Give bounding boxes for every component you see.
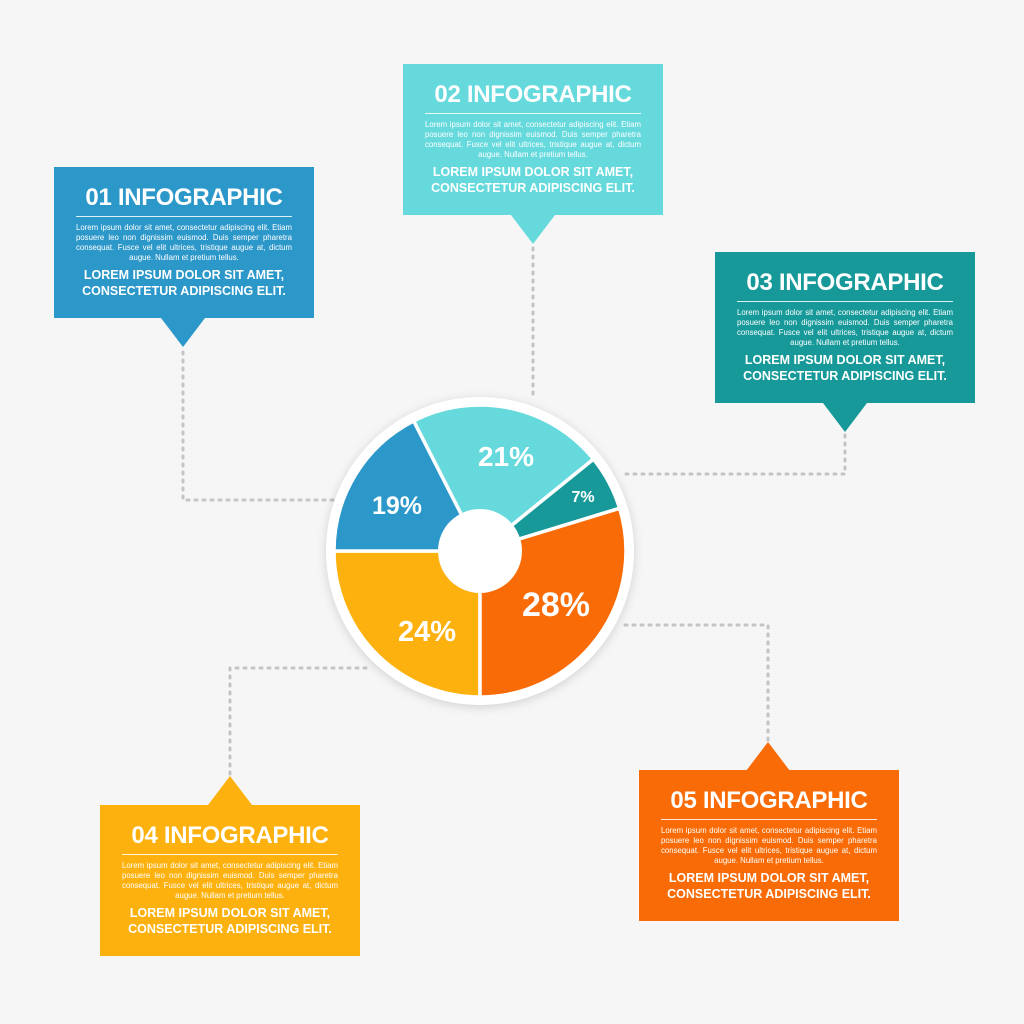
box 05: Lorem ipsum dolor sit amet, consectetur adipiscing elit. Etiam posuere leo non dignissim euismod. Duis semper pharetra consequat. Fusce vel elit ultrices, tristique augue at, dictum augue. Nullam et pretium tellus. — [661, 826, 877, 865]
box 03: LOREM IPSUM DOLOR SIT AMET, — [745, 353, 945, 367]
pie chart: 7% — [571, 489, 595, 506]
pie chart: 19% — [372, 492, 422, 520]
pointer 04 — [208, 776, 252, 805]
box 04: LOREM IPSUM DOLOR SIT AMET, — [130, 906, 330, 920]
slice 7% — [480, 459, 620, 551]
box 03: CONSECTETUR ADIPISCING ELIT. — [743, 369, 947, 383]
box 04: Lorem ipsum dolor sit amet, consectetur adipiscing elit. Etiam posuere leo non dignissim euismod. Duis semper pharetra consequat. Fusce vel elit ultrices, tristique augue at, dictum augue. Nullam et pretium tellus. — [122, 861, 338, 900]
box 02: Lorem ipsum dolor sit amet, consectetur adipiscing elit. Etiam posuere leo non dignissim euismod. Duis semper pharetra consequat. Fusce vel elit ultrices, tristique augue at, dictum augue. Nullam et pretium tellus. — [425, 120, 641, 159]
box 01: LOREM IPSUM DOLOR SIT AMET, — [84, 268, 284, 282]
box 01: CONSECTETUR ADIPISCING ELIT. — [82, 284, 286, 298]
box 05 — [639, 770, 899, 921]
box 04 — [100, 805, 360, 956]
pie chart: 24% — [398, 616, 456, 648]
box 05: LOREM IPSUM DOLOR SIT AMET, — [669, 871, 869, 885]
pointer 03 — [823, 403, 867, 432]
box 03: 03 INFOGRAPHIC — [746, 269, 944, 296]
box 02: CONSECTETUR ADIPISCING ELIT. — [431, 181, 635, 195]
box 05: CONSECTETUR ADIPISCING ELIT. — [667, 887, 871, 901]
pointer 05 — [746, 742, 790, 771]
box 03: Lorem ipsum dolor sit amet, consectetur adipiscing elit. Etiam posuere leo non dignissim euismod. Duis semper pharetra consequat. Fusce vel elit ultrices, tristique augue at, dictum augue. Nullam et pretium tellus. — [737, 308, 953, 347]
pie chart: 21% — [478, 441, 534, 472]
slice 19% — [334, 421, 480, 551]
box 01: Lorem ipsum dolor sit amet, consectetur adipiscing elit. Etiam posuere leo non dignissim euismod. Duis semper pharetra consequat. Fusce vel elit ultrices, tristique augue at, dictum augue. Nullam et pretium tellus. — [76, 223, 292, 262]
pointer 01 — [161, 318, 205, 347]
box 02: LOREM IPSUM DOLOR SIT AMET, — [433, 165, 633, 179]
slice 21% — [414, 405, 594, 551]
box 01 — [54, 167, 314, 318]
slice 28% — [480, 508, 626, 697]
box 02: 02 INFOGRAPHIC — [434, 81, 632, 108]
box 02 — [403, 64, 663, 215]
box 04: 04 INFOGRAPHIC — [131, 822, 329, 849]
pointer 02 — [511, 215, 555, 244]
box 05: 05 INFOGRAPHIC — [670, 787, 868, 814]
pie chart: 28% — [522, 586, 590, 624]
box 03 — [715, 252, 975, 403]
slice 24% — [334, 551, 480, 697]
box 04: CONSECTETUR ADIPISCING ELIT. — [128, 922, 332, 936]
box 01: 01 INFOGRAPHIC — [85, 184, 283, 211]
